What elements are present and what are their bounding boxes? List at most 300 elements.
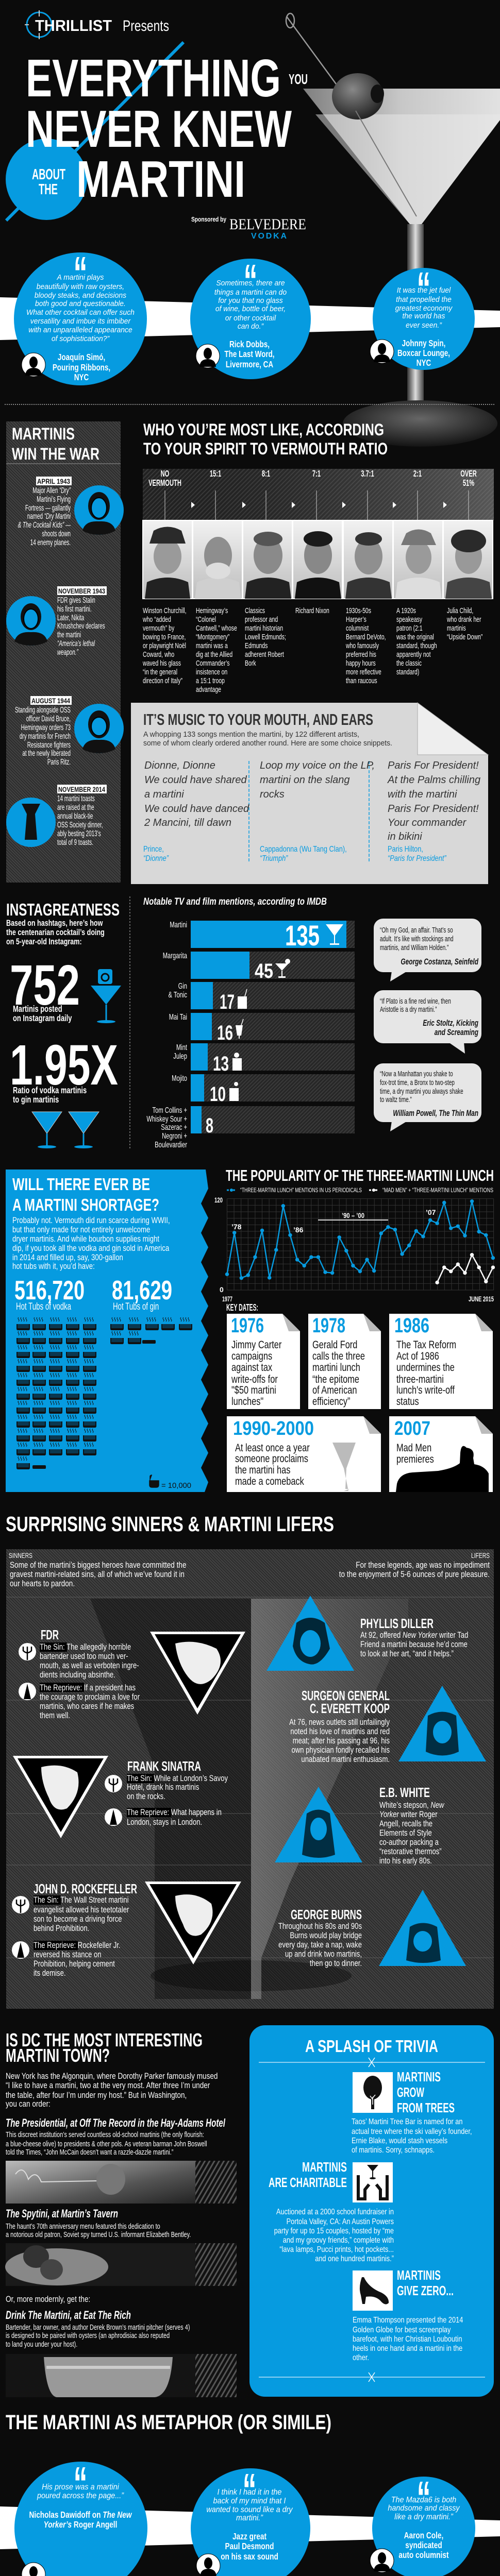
sinner: FDR: FDR — [41, 1627, 59, 1642]
lifer: e.b. white — [275, 1785, 444, 1866]
captions: ratio personalities: Classics — [245, 606, 265, 615]
quote bubble: aaron cole: like a dry martini.” — [394, 2512, 454, 2521]
quote bubble: Joaquin Simo: Pouring Ribbons, — [53, 363, 110, 373]
card: 1978: “the epitome — [312, 1373, 359, 1385]
quote bubble: Johnny Spin: ever seen.” — [406, 321, 442, 330]
panel: sinners and lifers background — [6, 1549, 494, 2009]
card: 1990-2000: At least once a year — [235, 1442, 310, 1453]
sinner: john d. rockefeller: evangelist allowed his teetotaler — [34, 1905, 129, 1914]
captions: ratio personalities: adherent Robert — [245, 650, 284, 658]
card: 2007 mad men: premieres — [396, 1453, 434, 1465]
item: drink the martini: to land you under your host). — [6, 2340, 77, 2348]
captions: ratio personalities: martini was a — [196, 641, 228, 650]
quote bubble: nicholas dawidoff: Yorker’s Roger Angell — [44, 2520, 117, 2530]
speech bubble: william powell: William Powell, The Thin Man — [393, 1109, 478, 1118]
card: 1976: Jimmy Carter — [231, 1338, 281, 1350]
line chart: three-martini lunch mentions: ’86 — [293, 1226, 304, 1234]
bar chart: imdb mentions: Gin — [178, 981, 187, 990]
lyrics: paris hilton: in bikini — [388, 831, 422, 842]
captions: ratio personalities: who famously — [345, 641, 379, 650]
heading: the martini as metaphor: THE MARTINI AS METAPHOR (OR SIMILE) — [6, 2411, 331, 2434]
entry: november 1943: the martini — [57, 630, 81, 639]
trivia: martinis give zero: other. — [353, 2353, 369, 2362]
card: 1976: 1976 — [231, 1314, 264, 1337]
intro: lifers: For these legends, age was no impediment — [356, 1561, 490, 1570]
entry: april 1943: named “Dry Martini — [27, 512, 71, 521]
bar chart: imdb mentions: Martini — [170, 920, 187, 929]
quote bubble: Joaquin Simo: versatility and imbue its imbiber — [30, 317, 131, 326]
speech bubble: eric stoltz: “If Plato is a fine red wine, then — [380, 996, 451, 1006]
heading: martinis win the war — [6, 425, 121, 464]
captions: ratio personalities: “Colonel — [196, 615, 216, 623]
card: 1978: efficiency” — [312, 1395, 350, 1407]
panel: will there ever be a martini shortage: but that only made for not entirely unwelcome — [12, 1225, 150, 1234]
lifer: george burns: up and drink two martinis, — [285, 1949, 362, 1959]
trivia: martinis are charitable: and one hundred martinis.” — [315, 2255, 394, 2263]
song credits: Paris Hilton, — [388, 845, 423, 854]
captions: ratio personalities: 1930s-50s — [346, 606, 371, 615]
card: 1990-2000: the martini has — [235, 1464, 290, 1476]
ratio scale band: 2:1 — [413, 468, 422, 479]
quote bubble: Joaquin Simo — [14, 247, 147, 385]
card: 1990-2000: 1990-2000 — [233, 1418, 314, 1439]
quote bubble: Joaquin Simo: “ — [73, 247, 88, 299]
speech bubble: george costanza: martinis, and William Holden.” — [380, 943, 448, 952]
line chart: three-martini lunch mentions: 0 — [220, 1285, 224, 1294]
sinner: frank sinatra: The Reprieve: What happens in — [127, 1807, 222, 1817]
captions: ratio personalities — [142, 606, 482, 693]
quote bubble: Joaquin Simo: A martini plays — [57, 274, 104, 282]
stat: 752 martinis daily: Martinis posted — [13, 1004, 62, 1014]
sinner: FDR: The Sin: The allegedly horrible — [40, 1642, 131, 1652]
song credits — [143, 845, 447, 863]
captions: ratio personalities: advantage — [196, 685, 221, 693]
entry: august 1944: AUGUST 1944 — [31, 697, 70, 705]
entry: november 2014: total of 9 toasts. — [57, 838, 93, 847]
quote bubble: paul desmond: on his sax sound — [221, 2552, 278, 2562]
quote bubble: Rick Dobbs — [190, 255, 311, 379]
portrait photos: ratio personalities — [143, 520, 493, 599]
card: 1976: against tax — [231, 1361, 273, 1373]
bar chart: imdb mentions: 45 — [255, 960, 273, 982]
lifer: phyllis diller: Friend a martini because he’d come — [360, 1639, 468, 1649]
captions: ratio personalities: was the original — [396, 632, 434, 641]
quote bubble: paul desmond: Jazz great — [232, 2532, 267, 2542]
item: the spytini: a notorious old patron, Soviet spy turned U.S. informant Elizabeth Bentley. — [6, 2230, 191, 2239]
sinner: john d. rockefeller — [12, 1881, 241, 1978]
speech bubble: william powell: “Now a Manhattan you shake to — [380, 1069, 453, 1078]
panel: music to your mouth: A whopping 133 songs mention the martini, by 122 different artists, — [143, 730, 359, 739]
captions: ratio personalities: a 15:1 troop — [196, 676, 225, 685]
item: drink the martini: is designed to be paired with oysters (an aphrodisiac also reputed — [6, 2331, 170, 2340]
icon: two martini glasses — [32, 1112, 99, 1148]
card: 1978 — [308, 1314, 381, 1409]
captions: ratio personalities: more reflective — [346, 667, 381, 676]
entry: april 1943: Martini’s Flying — [37, 495, 71, 504]
captions: ratio personalities: columnist — [346, 623, 369, 632]
quote bubble: paul desmond: wanted to sound like a dry — [206, 2505, 293, 2514]
quote bubble: paul desmond: Paul Desmond — [225, 2541, 274, 2552]
quote bubble: Johnny Spin: that propelled the — [396, 296, 452, 304]
heading: is dc the most interesting martini town: IS DC THE MOST INTERESTING — [6, 2029, 203, 2050]
panel: will there ever be a martini shortage — [6, 1170, 208, 1492]
ratio scale band: NO — [161, 468, 170, 479]
quote bubble: Joaquin Simo: Joaquín Simó, — [58, 352, 105, 363]
section: instagreatness and imdb mentions — [6, 896, 481, 1149]
captions: ratio personalities: Bernard DeVoto, — [346, 632, 386, 641]
captions: ratio personalities: who “added — [142, 615, 171, 623]
entry: november 1943 — [6, 586, 107, 657]
card: 1976 — [227, 1314, 300, 1409]
captions: ratio personalities: martini historian — [245, 623, 283, 632]
heading: martinis win the war: WIN THE WAR — [12, 445, 99, 463]
card: 1990-2000 — [227, 1416, 381, 1492]
logo: thrillist: Presents — [123, 18, 169, 35]
quote bubble: Johnny Spin: greatest economy — [395, 304, 453, 313]
lifer: e.b. white: Angell, recalls the — [379, 1819, 432, 1828]
trivia: martinis grow from trees: of martinis. Sorry, schnapps. — [352, 2146, 435, 2155]
lyrics: prince: a martini — [144, 789, 184, 800]
title: everything you never knew about the martini — [6, 42, 308, 221]
lifer: phyllis diller: to look at her art, “and it helps.” — [360, 1649, 454, 1658]
captions: ratio personalities: martinis — [447, 623, 466, 632]
lyrics: prince: We could have danced — [144, 803, 249, 815]
entry: august 1944: Resistance fighters — [27, 740, 71, 750]
quote bubble: Johnny Spin: It was the jet fuel — [397, 286, 451, 295]
captions: ratio personalities: “Upside Down” — [447, 632, 482, 641]
lifer: e.b. white: “restorative thermos” — [379, 1846, 442, 1856]
text: dc intro: the table, after four I’m under my host.” But in Washington, — [6, 2091, 187, 2100]
sinner: FDR: bartender used too much ver- — [40, 1651, 128, 1661]
bar chart: imdb mentions: Mint — [176, 1042, 187, 1052]
item: the presidential: a blue-cheese olive) to presidents & other pols. As veteran barman John Boswell — [6, 2139, 207, 2148]
card: 1978: calls the three — [312, 1350, 365, 1362]
entry: april 1943: 14 enemy planes. — [30, 538, 71, 547]
card: 1978: 1978 — [312, 1314, 345, 1337]
speech bubble: eric stoltz: Eric Stoltz, Kicking — [423, 1019, 478, 1028]
quote bubble: Joaquin Simo: NYC — [74, 372, 89, 383]
lyrics: paris hilton — [387, 760, 480, 842]
heading: is dc the most interesting martini town: MARTINI TOWN? — [6, 2045, 110, 2066]
item: drink the martini — [6, 2295, 237, 2397]
entry: november 2014: annual black-tie — [57, 811, 93, 821]
lifer: e.b. white: White’s stepson, New — [379, 1800, 444, 1810]
captions: ratio personalities: direction of Italy” — [143, 676, 182, 685]
ratio scale band: 8:1 — [262, 468, 270, 479]
quote bubble: Rick Dobbs: Livermore, CA — [226, 360, 274, 370]
sponsor: belvedere vodka: BELVEDERE — [229, 216, 306, 233]
ratio scale band — [143, 468, 494, 520]
lyrics: prince — [144, 760, 249, 828]
entry: november 1943: weapon.” — [57, 648, 78, 657]
line chart: three-martini lunch mentions: 120 — [214, 1196, 223, 1204]
stat: 1.95x vodka to gin — [10, 1033, 118, 1105]
captions: ratio personalities: Richard Nixon — [295, 606, 329, 615]
section: dc martini town and trivia — [5, 2025, 494, 2397]
item: the presidential — [6, 2116, 237, 2204]
lifer: e.b. white: Yorker writer Roger — [379, 1809, 438, 1819]
item: the spytini: The haunt’s 70th anniversary menu featured this dedication to — [6, 2222, 160, 2230]
card: 2007 mad men — [389, 1416, 493, 1492]
card: 1990-2000: made a comeback — [235, 1475, 304, 1487]
captions: ratio personalities: waved his glass — [142, 658, 181, 667]
heading: instagreatness: on 5-year-old Instagram: — [6, 937, 82, 947]
title: everything you never knew about the martini: MARTINI — [76, 150, 245, 208]
lifer: george burns: Throughout his 80s and 90s — [278, 1921, 362, 1931]
card: 1978: martini lunch — [312, 1361, 360, 1373]
bar chart: imdb mentions: 8 — [206, 1114, 213, 1137]
quote bubble: Johnny Spin: NYC — [416, 358, 431, 368]
panel: will there ever be a martini shortage: Hot Tubs of gin — [113, 1301, 159, 1312]
trivia: martinis grow from trees: FROM TREES — [397, 2100, 455, 2115]
speech bubble: william powell — [374, 1063, 481, 1131]
item: the presidential: The Presidential, at Off The Record in the Hay-Adams Hotel — [6, 2116, 226, 2129]
ratio scale band: 3.7:1 — [361, 468, 374, 479]
line chart: three-martini lunch mentions: ’07 — [426, 1208, 436, 1216]
bar chart: imdb mentions: Mai Tai — [169, 1012, 187, 1021]
lyrics: cappadonna: martini on the slang — [260, 774, 350, 786]
captions: ratio personalities: Lowell Edmunds; — [245, 632, 286, 641]
entry: august 1944: at the newly liberated — [22, 749, 71, 758]
entry: november 2014: ably besting 2013’s — [57, 829, 101, 838]
lifer: george burns: Burns would play bridge — [290, 1930, 362, 1940]
captions: ratio personalities: Coward, who — [143, 650, 174, 658]
quote bubble: Rick Dobbs: things a martini can do — [214, 289, 287, 297]
trivia: martinis grow from trees: Taos’ Martini Tree Bar is named for an — [352, 2117, 463, 2126]
captions: ratio personalities: apparently not — [396, 650, 431, 658]
speech bubble: eric stoltz — [374, 990, 481, 1054]
card: 1976: write-offs for — [231, 1373, 278, 1385]
sponsor: belvedere vodka — [191, 215, 306, 241]
card: 1986: lunch's write-off — [396, 1384, 455, 1396]
intro: sinners: Some of the martini’s biggest heroes have committed the — [10, 1561, 187, 1570]
legend: tub equals 10,000 — [149, 1475, 191, 1490]
section: martini shortage and three-martini lunch — [6, 1166, 495, 1492]
quote bubble: nicholas dawidoff: Nicholas Dawidoff on The New — [29, 2510, 132, 2520]
trivia: martinis give zero: Golden Globe for best screenplay — [353, 2326, 451, 2334]
sinner: FDR: them well. — [40, 1710, 70, 1720]
title: everything you never knew about the martini: NEVER KNEW — [26, 100, 292, 158]
captions: ratio personalities: insistence on — [196, 667, 227, 676]
sinner: john d. rockefeller: Prohibition, helping cement — [34, 1959, 115, 1969]
stat: 1.95x vodka to gin: Ratio of vodka martinis — [13, 1086, 87, 1096]
lyrics: paris hilton: At the Palms chilling — [387, 774, 480, 786]
heading: instagreatness: Based on hashtags, here’s how — [6, 918, 103, 928]
section: martini as metaphor — [0, 2411, 500, 2576]
lyrics: cappadonna: rocks — [260, 789, 285, 800]
item: drink the martini: Or, more modernly, get the: — [6, 2295, 90, 2304]
sinner: john d. rockefeller: reversed his stance on — [34, 1950, 102, 1959]
trivia: martinis give zero: GIVE ZERO... — [397, 2283, 454, 2298]
entry: november 1943: FDR gives Stalin — [57, 596, 95, 605]
heading: who you're most like: TO YOUR SPIRIT TO VERMOUTH RATIO — [143, 439, 388, 458]
item: the presidential: told the Times, “John McCain doesn’t want a razzle-dazzle martini.” — [6, 2147, 173, 2156]
intro: sinners: SINNERS — [9, 1551, 32, 1560]
sinner: john d. rockefeller: JOHN D. ROCKEFELLER — [34, 1881, 137, 1896]
quote bubble: Rick Dobbs: Sometimes, there are — [216, 279, 285, 287]
heading: who you're most like — [143, 420, 388, 458]
panel: will there ever be a martini shortage: 516,720 — [14, 1276, 85, 1306]
quote bubble: Rick Dobbs: of wine, bottle of beer, — [215, 305, 286, 313]
sinner: FDR: The Reprieve: If a president has — [40, 1683, 136, 1692]
quote bubble: Rick Dobbs: can do.” — [238, 323, 264, 331]
title: everything you never knew about the martini: ABOUT — [32, 166, 65, 183]
bar chart: imdb mentions: 16 — [217, 1022, 233, 1044]
sinner: frank sinatra: The Sin: While at London’s Savoy — [127, 1773, 228, 1783]
lyrics: prince: Dionne, Dionne — [144, 760, 215, 771]
legend: tub equals 10,000: = 10,000 — [161, 1481, 191, 1490]
quote bubble: Johnny Spin — [370, 263, 475, 370]
heading: who you're most like: WHO YOU’RE MOST LIKE, ACCORDING — [143, 420, 384, 439]
quote bubble: aaron cole: syndicated — [405, 2540, 442, 2551]
speech bubble: george costanza: George Costanza, Seinfeld — [401, 957, 479, 967]
card: 1976: lunches" — [231, 1395, 263, 1407]
lifer: e.b. white: Elements of Style — [379, 1828, 432, 1838]
ratio scale band: OVER — [460, 468, 477, 479]
entry: april 1943: Fortress — gallantly — [25, 503, 71, 513]
captions: ratio personalities: Commander’s — [196, 658, 230, 667]
quote bubble: nicholas dawidoff: “ — [73, 2458, 88, 2509]
ratio scale band: 15:1 — [210, 468, 221, 479]
entry: april 1943: Major Allen “Dry” — [32, 486, 71, 495]
trivia: martinis are charitable: Auctioned at a 2000 school fundraiser in — [276, 2208, 394, 2216]
captions: ratio personalities: professor and — [245, 615, 278, 623]
trivia: martinis grow from trees: MARTINIS — [397, 2069, 441, 2084]
captions: ratio personalities: standard, though — [396, 641, 437, 650]
captions: ratio personalities: Julia Child, — [447, 606, 473, 615]
captions: ratio personalities: standard) — [396, 667, 419, 676]
quote bubble: aaron cole: Aaron Cole, — [404, 2531, 443, 2541]
panel: will there ever be a martini shortage: dryer martinis. And while bourbon supplies might — [12, 1234, 160, 1244]
quote band — [0, 2506, 500, 2549]
song credits: Cappadonna (Wu Tang Clan), — [260, 845, 347, 854]
quote bubble: Rick Dobbs: Rick Dobbs, — [229, 340, 270, 350]
song credits: “Paris for President” — [388, 854, 447, 863]
speech bubble: george costanza: “Oh my God, an affair. That’s so — [380, 925, 453, 935]
lifer: surgeon general c. everett koop: SURGEON GENERAL — [302, 1688, 390, 1703]
trivia: martinis grow from trees: actual tree where the ski valley’s founder, — [352, 2127, 472, 2136]
entry: november 1943: his first martini. — [57, 604, 92, 614]
panel: will there ever be a martini shortage: hot tubs with it, you’d have: — [12, 1262, 95, 1271]
text: dc intro: “I like to have a martini, two at the very most. After three I’m under — [6, 2081, 210, 2090]
captions: ratio personalities: speakeasy — [396, 615, 423, 623]
speech bubble: george costanza: adult. It’s like with stockings and — [380, 934, 454, 943]
panel: music to your mouth: some of whom clearly ordered another round. Here are some choice snippets. — [143, 739, 392, 748]
quote bubble: nicholas dawidoff — [14, 2458, 147, 2576]
line chart: three-martini lunch mentions: ’90 – ’00 — [342, 1211, 364, 1219]
lifer: e.b. white: co-author packing a — [379, 1837, 439, 1847]
quote bubble: Rick Dobbs: or other cocktail — [225, 314, 276, 323]
label: key dates: KEY DATES: — [226, 1302, 258, 1313]
quote bubble: aaron cole — [370, 2472, 475, 2576]
bar chart: imdb mentions: Julep — [173, 1051, 187, 1060]
intro: sinners — [9, 1551, 187, 1588]
quote bubble: aaron cole: auto columnist — [398, 2550, 449, 2561]
card: 1986: The Tax Reform — [396, 1338, 456, 1350]
song credits: “Triumph” — [260, 854, 288, 863]
quote bubble: Joaquin Simo: with an unparalleled appearance — [28, 326, 132, 334]
bar chart: imdb mentions: & Tonic — [169, 990, 187, 999]
trivia: martinis give zero: barefoot, with her Christian Louboutin — [353, 2335, 462, 2344]
quote bubble: paul desmond: “ — [242, 2464, 257, 2516]
card: 1986: 1986 — [394, 1314, 429, 1337]
quote bubble: Rick Dobbs: “ — [243, 255, 258, 307]
section: war panel, vermouth ratio, music — [6, 420, 494, 884]
captions: ratio personalities: dig at the Allied — [196, 650, 232, 658]
bar chart: imdb mentions: 10 — [210, 1083, 226, 1106]
line chart: three-martini lunch mentions — [214, 1196, 495, 1303]
quote bubble: paul desmond: martini.” — [236, 2513, 263, 2522]
lifer: surgeon general c. everett koop: meat; after his passing at 96, his — [293, 1736, 390, 1745]
sinner: john d. rockefeller: The Sin: The Wall Street martini — [34, 1895, 129, 1905]
captions: ratio personalities: A 1920s — [396, 606, 416, 615]
entry: april 1943 — [18, 477, 124, 547]
lifer: e.b. white: into his early 80s. — [379, 1856, 432, 1866]
heading: is dc the most interesting martini town — [6, 2029, 203, 2066]
bar chart: imdb mentions: Margarita — [163, 951, 187, 960]
item: the presidential: This discreet institution’s served countless old-school martinis (the only flourish: — [6, 2130, 204, 2139]
text: dc intro — [6, 2072, 218, 2109]
heading: instagreatness: the centenarian cocktail’s doing — [6, 927, 105, 938]
lyrics: cappadonna — [260, 760, 375, 800]
card: 1986: status — [396, 1395, 419, 1407]
card: 1976: campaigns — [231, 1350, 272, 1362]
speech bubble: william powell: time, a dry martini you always shake — [380, 1087, 463, 1096]
heading: popularity of the three-martini lunch — [226, 1166, 494, 1194]
panel: martinis win the war (background) — [6, 421, 121, 883]
trivia: martinis give zero: heels in one hand and a martini in the — [353, 2344, 462, 2353]
trivia: martinis are charitable: Portola Valley, CA: An Austin Powers — [287, 2217, 394, 2226]
ratio scale band: 7:1 — [312, 468, 321, 479]
sponsor: belvedere vodka: VODKA — [251, 232, 287, 241]
lifer: george burns: GEORGE BURNS — [291, 1907, 362, 1922]
entry: november 1943: “America’s lethal — [57, 639, 95, 648]
card: 2007 mad men: Mad Men — [396, 1442, 431, 1453]
quote bubble: Johnny Spin: the world has — [403, 312, 445, 320]
heading: popularity of the three-martini lunch: “THREE-MARTINI LUNCH” MENTIONS IN US PERIODICALS — [240, 1187, 362, 1194]
lifer: surgeon general c. everett koop: own physician fondly recalled his — [292, 1745, 390, 1755]
song credits: Prince, — [143, 845, 164, 854]
card: 1986: three-martini — [396, 1373, 444, 1385]
sinner: FDR — [19, 1627, 245, 1720]
lyrics: prince: 2 Mancini, till dawn — [144, 817, 231, 828]
trivia: martinis are charitable: and my groovy friends,” complete with — [283, 2236, 394, 2245]
captions: ratio personalities: or playwright Noël — [143, 641, 186, 650]
captions: ratio personalities: who drank her — [446, 615, 481, 623]
quote bubble: Joaquin Simo: of sophistication?” — [52, 335, 110, 343]
captions: ratio personalities: “in the general — [143, 667, 177, 676]
entry: november 1943: Khrushchev declares — [57, 621, 105, 631]
lifer: phyllis diller: PHYLLIS DILLER — [360, 1616, 434, 1631]
bar chart: imdb mentions: Tom Collins + — [153, 1105, 187, 1114]
logo: thrillist — [25, 10, 169, 39]
heading: martinis win the war: MARTINIS — [12, 425, 75, 443]
lifer: surgeon general c. everett koop — [289, 1686, 486, 1764]
entry: november 2014: NOVEMBER 2014 — [58, 785, 105, 793]
lifer: surgeon general c. everett koop: unabated martini enthusiasm. — [301, 1754, 390, 1764]
intro: lifers: to the enjoyment of 5-6 ounces of pure pleasure. — [339, 1570, 490, 1579]
stat: 1.95x vodka to gin: to gin martinis — [13, 1095, 59, 1105]
sinner: john d. rockefeller: The Reprieve: Rockefeller Jr. — [34, 1940, 121, 1950]
speech bubble: eric stoltz: Aristotle is a dry martini.” — [380, 1005, 437, 1014]
bar chart: imdb mentions — [146, 919, 355, 1149]
lyrics: paris hilton: Paris For President! — [388, 760, 479, 771]
sinner: john d. rockefeller: its demise. — [34, 1968, 65, 1978]
title: everything you never knew about the martini: THE — [39, 181, 58, 198]
quote bubble: nicholas dawidoff: His prose was a martini — [42, 2482, 119, 2492]
trivia: martinis are charitable: party for up to 15 couples, hosted by “me — [274, 2227, 394, 2235]
quote bubble: paul desmond: I think I had it in the — [218, 2487, 281, 2497]
